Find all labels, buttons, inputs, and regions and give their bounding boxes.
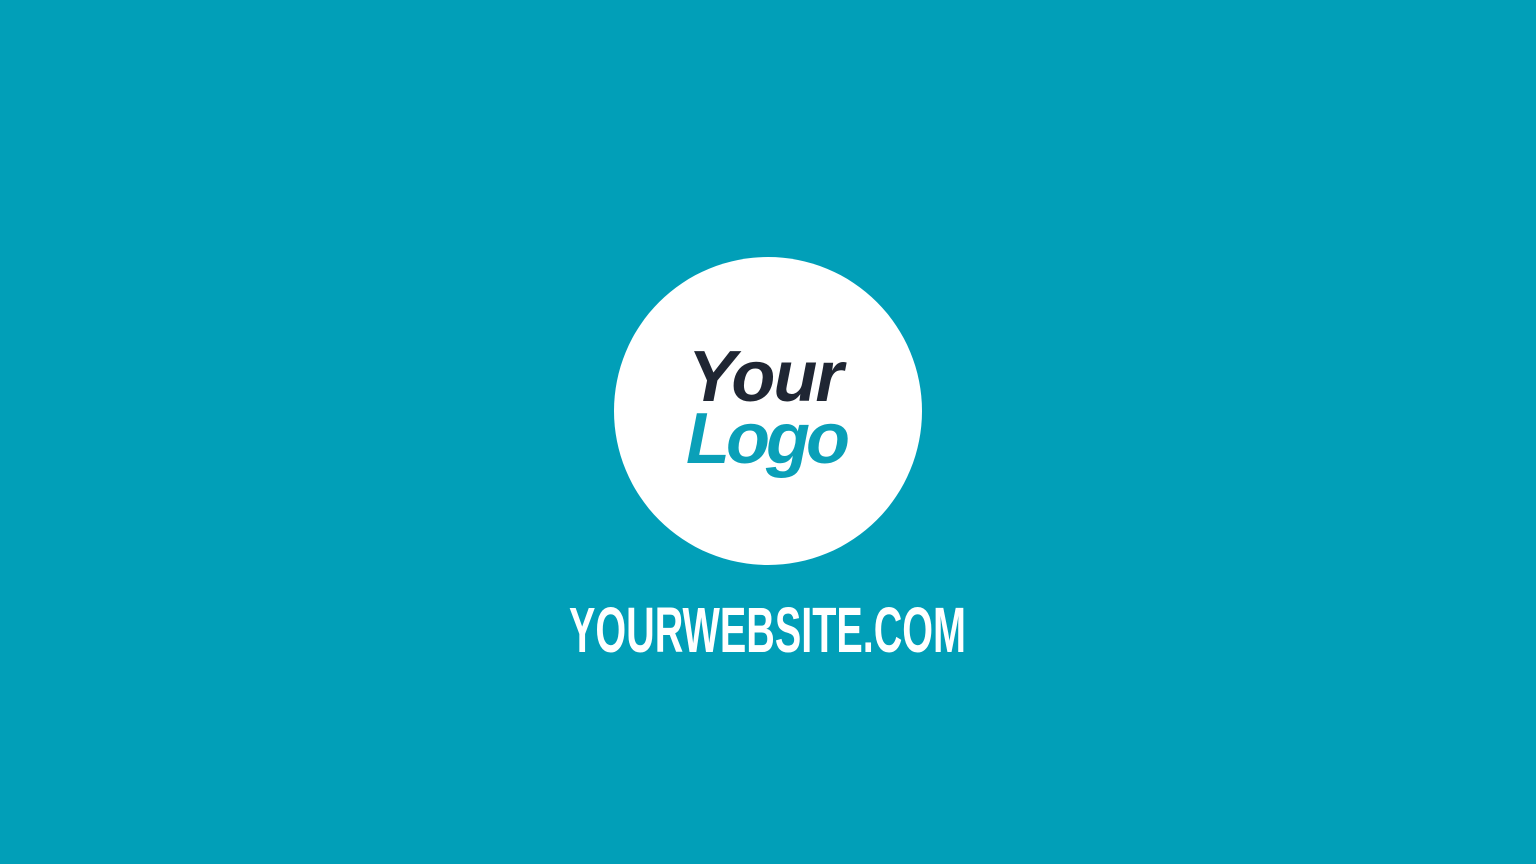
logo circle [614, 257, 922, 565]
word: Your: Your [688, 337, 841, 417]
word: Logo: Logo [686, 399, 846, 479]
website url: YOURWEBSITE.COM [569, 594, 966, 666]
logo text [686, 337, 848, 479]
